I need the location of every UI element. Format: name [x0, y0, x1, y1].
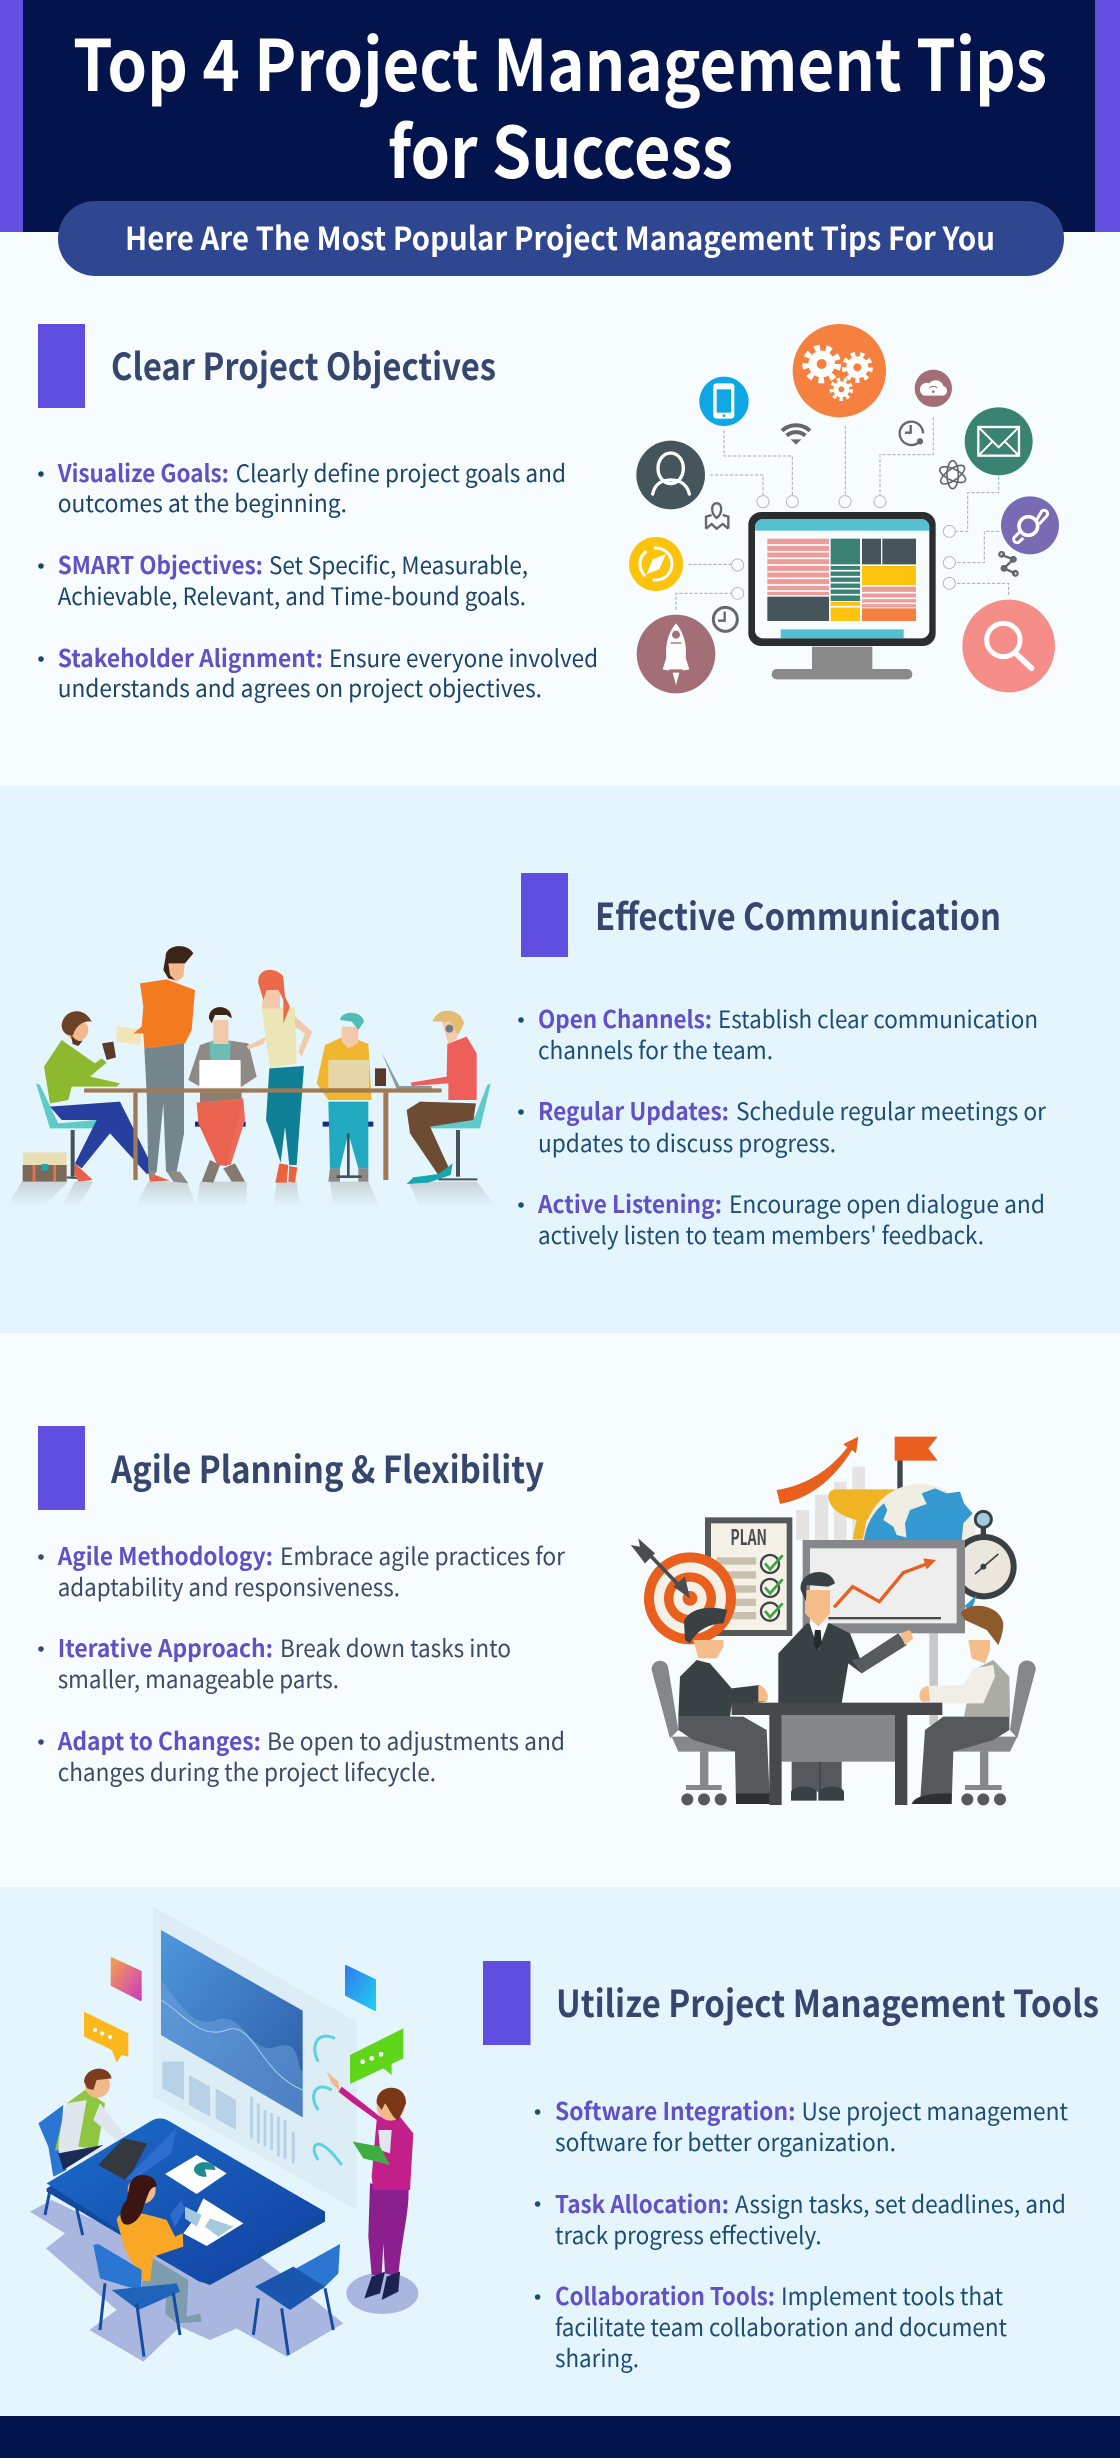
- icon: compass: [629, 537, 683, 591]
- bullet list: Implement tools that: [781, 2277, 1003, 2312]
- heading: Agile Planning & Flexibility: [110, 1440, 544, 1494]
- bullet list: Achievable, Relevant, and Time-bound goals.: [58, 577, 526, 612]
- table: [84, 1088, 442, 1180]
- stopwatch: [951, 1511, 1017, 1610]
- icon: wifi cloud: [915, 370, 952, 407]
- small icons: [706, 422, 1018, 631]
- bullet list: Break down tasks into: [280, 1629, 511, 1664]
- bullet list: Task Allocation:: [555, 2185, 729, 2220]
- bullet list: Software Integration:: [555, 2092, 796, 2127]
- chat bubble: yellow: [84, 2012, 128, 2063]
- bullet list: smaller, manageable parts.: [58, 1660, 339, 1695]
- bullet list: track progress effectively.: [555, 2216, 822, 2251]
- subtitle pill: Here Are The Most Popular Project Management Tips For You: [125, 214, 995, 260]
- bullet list: Regular Updates:: [538, 1092, 729, 1127]
- footer bar: [0, 2416, 1120, 2458]
- bullet list: Embrace agile practices for: [280, 1537, 566, 1572]
- illustration: team around a table: [7, 946, 497, 1207]
- floor shadows: [7, 1182, 497, 1207]
- target with arrow: [631, 1538, 736, 1644]
- bullet list: Active Listening:: [537, 1185, 722, 1220]
- bullet list: Use project management: [802, 2092, 1068, 2127]
- person: woman with phone: [117, 2175, 202, 2323]
- plan board: PLAN: [730, 1521, 767, 1552]
- chairs: [93, 2244, 340, 2357]
- bullet list: Visualize Goals:: [57, 454, 229, 489]
- bullet list: Ensure everyone involved: [329, 639, 598, 674]
- person: headset: [382, 1011, 491, 1184]
- icon: gears: [793, 324, 886, 417]
- icon: phone: [699, 377, 749, 426]
- decorative tiles: [112, 1958, 375, 2010]
- floor shadow: [30, 2200, 343, 2362]
- panel: effective communication: [0, 786, 1120, 1333]
- person: presenting woman: [327, 2072, 413, 2300]
- person: man at table: [38, 2069, 127, 2177]
- bullet list: [535, 2092, 1068, 2374]
- person: yellow hoodie: [317, 1013, 386, 1182]
- icon: user: [636, 441, 705, 509]
- bullet list: Iterative Approach:: [58, 1629, 273, 1664]
- flag: [895, 1437, 938, 1497]
- icon: rocket: [637, 615, 715, 693]
- bullet list: [518, 1000, 1047, 1251]
- heading: Effective Communication: [595, 887, 1001, 941]
- monitor: [748, 512, 936, 679]
- bullet list: Collaboration Tools:: [555, 2277, 775, 2312]
- bullet list: Be open to adjustments and: [267, 1722, 565, 1757]
- bullet list: Encourage open dialogue and: [729, 1185, 1045, 1220]
- bullet list: Assign tasks, set deadlines, and: [735, 2185, 1066, 2220]
- subtitle pill: [58, 201, 1064, 276]
- panel: clear project objectives: [0, 232, 1120, 786]
- bullet list: facilitate team collaboration and document: [555, 2308, 1007, 2343]
- person: orange shirt: [116, 946, 195, 1183]
- heading marker: [38, 1426, 85, 1510]
- person: green sweater: [23, 1011, 170, 1182]
- dashboard board: [153, 1907, 357, 2210]
- bullet list: SMART Objectives:: [58, 546, 263, 581]
- header banner: [0, 0, 1120, 276]
- illustration: monitor with connected icons: [629, 324, 1059, 693]
- bullet list: Establish clear communication: [718, 1000, 1038, 1035]
- bullet list: updates to discuss progress.: [538, 1124, 836, 1159]
- bullet list: Clearly define project goals and: [236, 454, 566, 489]
- bullet list: changes during the project lifecycle.: [58, 1753, 436, 1788]
- illustration: business meeting with plan and chart: [631, 1437, 1036, 1805]
- icon: link: [1001, 496, 1059, 554]
- faint bars: [796, 1467, 865, 1540]
- globe: [864, 1484, 976, 1540]
- title: [73, 10, 1047, 199]
- bullet list: Open Channels:: [538, 1000, 712, 1035]
- bullet list: [38, 1537, 566, 1788]
- whiteboard with chart: [803, 1540, 965, 1725]
- bullet list: Schedule regular meetings or: [736, 1092, 1047, 1127]
- bullet list: adaptability and responsiveness.: [58, 1568, 400, 1603]
- bullet list: outcomes at the beginning.: [58, 484, 347, 519]
- bullet list: Adapt to Changes:: [57, 1722, 261, 1757]
- bullet list: [38, 454, 598, 704]
- person: right seated: [912, 1606, 1036, 1805]
- bullet list: software for better organization.: [555, 2123, 896, 2158]
- person: presenter: [778, 1572, 913, 1801]
- person: left seated: [652, 1608, 770, 1805]
- plan board: [705, 1517, 792, 1636]
- icon: mail: [965, 407, 1033, 475]
- heading marker: [483, 1961, 530, 2045]
- panel: utilize project management tools: [0, 1887, 1120, 2416]
- person: woman standing: [247, 970, 312, 1183]
- person: centre seated: [188, 1007, 257, 1183]
- bullet list: actively listen to team members' feedback.: [538, 1216, 984, 1251]
- bullet list: sharing.: [555, 2339, 639, 2374]
- illustration: isometric meeting with dashboard: [30, 1907, 418, 2362]
- heading marker: [521, 873, 568, 957]
- growth arrow: [777, 1437, 858, 1504]
- heading marker: [38, 324, 85, 408]
- panel: agile planning and flexibility: [0, 1333, 1120, 1887]
- bullet list: channels for the team.: [538, 1031, 773, 1066]
- bullet list: understands and agrees on project objectives.: [58, 669, 542, 704]
- title: for Success: [388, 97, 733, 199]
- heading: Clear Project Objectives: [111, 337, 496, 391]
- table: [732, 1703, 942, 1805]
- bullet list: Agile Methodology:: [57, 1537, 273, 1572]
- icon: search: [962, 600, 1055, 692]
- table: [45, 2118, 325, 2285]
- bullet list: Stakeholder Alignment:: [58, 639, 323, 674]
- bullet list: Set Specific, Measurable,: [269, 546, 528, 581]
- chat bubble: green: [350, 2028, 403, 2084]
- funnel: [828, 1489, 897, 1539]
